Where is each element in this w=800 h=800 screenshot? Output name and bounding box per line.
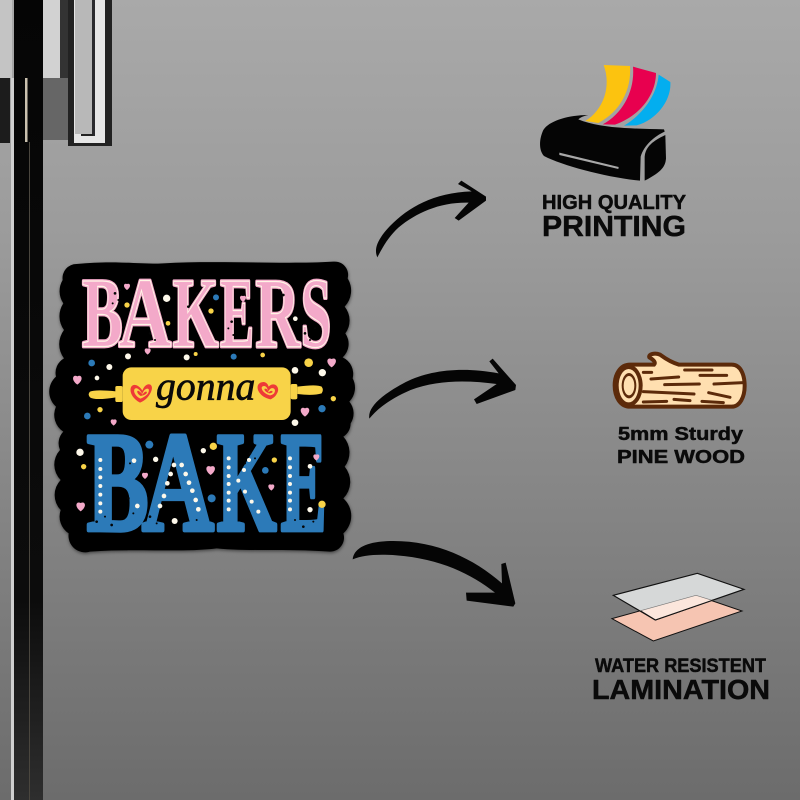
label: HIGH QUALITY: HIGH QUALITY [542, 191, 686, 214]
BAKERS cream inline [82, 258, 331, 368]
BAKERS cream inline: A [119, 258, 171, 368]
word: BAKE: B [87, 403, 149, 561]
word: BAKERS: B [82, 258, 123, 368]
rolling pin [89, 364, 323, 420]
icon: printer with colour sheets [540, 65, 670, 181]
fridge handle and door gap [0, 0, 112, 800]
BAKE distress speckle [95, 452, 314, 528]
icon: laminate sheets [612, 573, 744, 641]
word: BAKERS: R [255, 258, 301, 368]
arrow to printing [376, 181, 486, 257]
word: BAKERS: K [173, 258, 219, 368]
word: BAKE: A [142, 403, 214, 561]
BAKERS cream inline: K [173, 258, 219, 368]
rolling pin right handle [297, 385, 323, 395]
feature: high quality printing [540, 65, 686, 243]
magnet: Bakers gonna Bake [49, 258, 355, 561]
confetti dots and hearts [73, 284, 336, 524]
BAKE white marquee dots [98, 456, 292, 514]
heart: left [130, 384, 152, 403]
rolling pin body [123, 367, 291, 420]
arrows [353, 181, 516, 607]
label: 5mm Sturdy: 5mm Sturdy [618, 423, 744, 444]
feature: pine wood [615, 354, 745, 467]
BAKERS cream inline: R [255, 258, 301, 368]
BAKERS cream inline: S [301, 258, 331, 368]
word: BAKERS: A [119, 258, 171, 368]
magnet: Bakers gonna Bake: E [281, 403, 327, 561]
icon: wood log [615, 354, 745, 407]
label: WATER RESISTENT: WATER RESISTENT [595, 655, 766, 677]
word: BAKE: K [217, 403, 277, 561]
BAKERS cream inline: B [82, 258, 123, 368]
script: gonna: gonna [156, 364, 255, 409]
label: PINE WOOD: PINE WOOD [617, 446, 745, 467]
word: BAKERS: S [301, 258, 331, 368]
label: LAMINATION: LAMINATION [592, 674, 770, 705]
BAKERS cream inline: E [220, 258, 254, 368]
BAKERS distress speckle [112, 289, 323, 343]
heart: right [258, 382, 278, 399]
arrow to pine wood [369, 359, 516, 419]
word: BAKE [87, 403, 327, 561]
magnet black die-cut backing [49, 262, 355, 552]
word: BAKERS: E [220, 258, 254, 368]
word: BAKERS [82, 258, 331, 368]
feature: water resistant lamination [592, 573, 770, 705]
arrow to lamination [353, 541, 515, 607]
rolling pin left handle [89, 390, 116, 399]
label: PRINTING: PRINTING [542, 211, 686, 243]
